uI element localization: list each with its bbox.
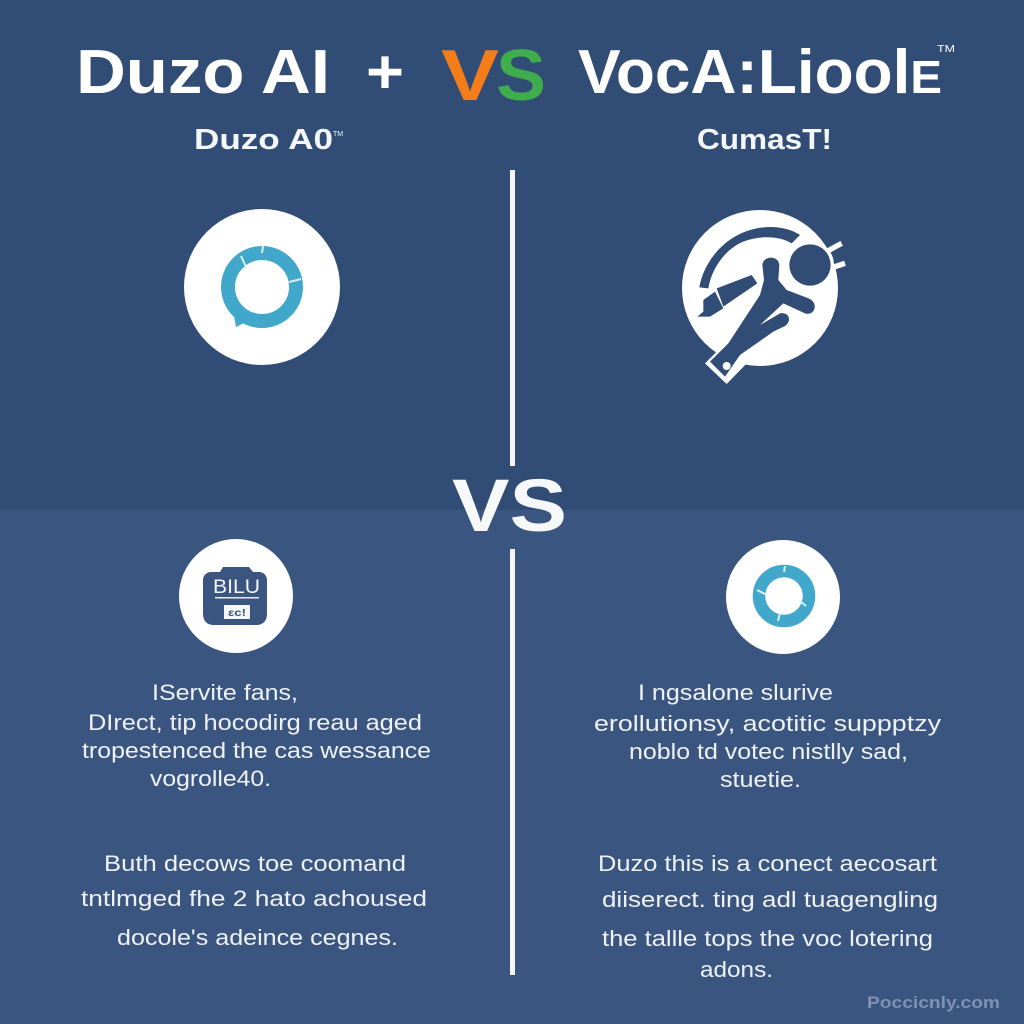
arc <box>699 227 800 288</box>
text block: right lower: adons. <box>700 957 773 982</box>
text block: left lower: tntlmged fhe 2 hato achoused <box>81 886 427 911</box>
text block: left upper <box>82 680 431 791</box>
text block: right upper: erollutionsy, acotitic suppptzy <box>594 711 942 736</box>
icon: blue ring top left <box>184 209 340 365</box>
text block: left lower: Buth decows toe coomand <box>104 851 406 876</box>
title: V <box>441 36 499 116</box>
center VS label: VS <box>452 464 567 547</box>
icon: wrench and gear top right <box>682 210 845 384</box>
title: + <box>366 38 404 107</box>
text block: right upper: I ngsalone slurive <box>638 680 833 705</box>
text block: left upper: IServite fans, <box>152 680 298 705</box>
left subheading: Duzo A0 <box>194 124 333 156</box>
text block: right lower: the tallle tops the voc lotering <box>602 926 933 951</box>
socket handle <box>717 275 757 307</box>
title: Duzo AI <box>76 38 330 107</box>
wrench body <box>710 258 815 377</box>
text block: right upper: noblo td votec nistlly sad, <box>629 739 908 764</box>
white grip border <box>705 342 750 384</box>
title <box>76 36 955 116</box>
watermark: Poccicnly.com <box>867 993 1000 1012</box>
icon: badge bottom left: BILU <box>213 577 260 598</box>
text block: left lower: docole's adeince cegnes. <box>117 925 398 950</box>
right subheading: CumasT! <box>697 124 832 156</box>
left subheading: TM <box>333 131 343 138</box>
text block: right upper <box>594 680 942 792</box>
text block: right lower <box>598 851 938 982</box>
icon: blue ring bottom right <box>726 540 840 654</box>
text block: right upper: stuetie. <box>720 767 801 792</box>
title: TM <box>937 44 955 55</box>
text block: right lower: Duzo this is a conect aecosart <box>598 851 938 876</box>
icon: badge bottom left: εc! <box>228 608 246 619</box>
text block: left upper: vogrolle40. <box>150 766 271 791</box>
text block: right lower: diiserect. ting adl tuagengling <box>602 887 938 912</box>
ball and prongs <box>786 241 845 289</box>
icon: badge bottom left <box>179 539 293 653</box>
text block: left upper: DIrect, tip hocodirg reau aged <box>88 710 422 735</box>
center divider <box>510 170 515 975</box>
text block: left lower <box>81 851 427 950</box>
title: VocA:LioolE <box>578 38 942 107</box>
title: S <box>496 36 546 116</box>
text block: left upper: tropestenced the cas wessance <box>82 738 431 763</box>
